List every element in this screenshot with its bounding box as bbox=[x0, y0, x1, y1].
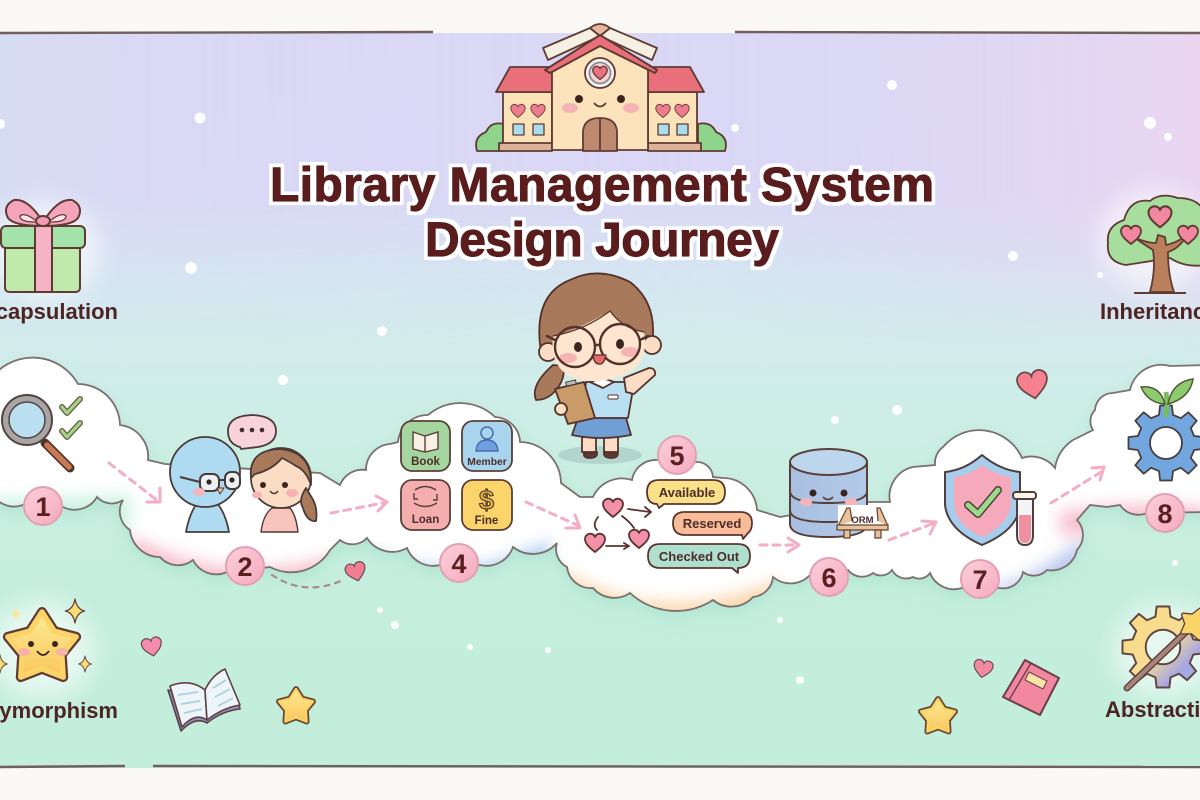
number badges: 8 bbox=[1157, 499, 1173, 529]
tile: fine: $ bbox=[479, 485, 494, 515]
corner icon glows bbox=[0, 190, 1200, 698]
dashed arrows between steps bbox=[109, 463, 1104, 552]
pill: available: Available bbox=[659, 485, 715, 500]
mouth bbox=[593, 355, 606, 364]
pill: reserved bbox=[673, 512, 752, 539]
step 1: magnifier and checks bbox=[2, 395, 80, 468]
pill: checked out bbox=[648, 544, 750, 573]
icon: small star left bbox=[279, 689, 313, 722]
icon: heart tree (inheritance) bbox=[1108, 196, 1200, 293]
sparkle dots bbox=[0, 80, 1178, 684]
librarian character bbox=[535, 273, 661, 464]
face bbox=[553, 311, 645, 381]
step 2: two people with speech bubble bbox=[170, 415, 316, 532]
step 8: gear with sprout bbox=[1128, 379, 1200, 480]
icon: gear and wand (abstraction) bbox=[1122, 605, 1200, 688]
title: Design Journey bbox=[425, 214, 779, 267]
title bbox=[270, 159, 934, 267]
hair back bbox=[539, 273, 653, 352]
ponytail bbox=[535, 365, 564, 400]
main block bbox=[552, 44, 648, 150]
pill: checked out: Checked Out bbox=[659, 549, 740, 564]
step 5: state machine bbox=[585, 480, 752, 573]
tile: loan: Loan bbox=[412, 514, 439, 526]
cloud path: journey trail bbox=[0, 358, 1200, 625]
pill: reserved: Reserved bbox=[683, 516, 741, 531]
open book roof bbox=[543, 28, 657, 60]
tile: fine bbox=[462, 480, 512, 530]
ears bbox=[539, 343, 557, 361]
icon: closed pink book bbox=[1003, 660, 1059, 715]
bushes bbox=[476, 123, 726, 151]
step 4: domain model tiles bbox=[401, 421, 512, 530]
number badges: 5 bbox=[669, 441, 685, 471]
school face bbox=[562, 95, 639, 113]
step 7: shield and test tube bbox=[945, 455, 1036, 545]
skirt bbox=[572, 418, 631, 438]
clipboard bbox=[555, 382, 595, 424]
icon: small star right bbox=[921, 699, 955, 732]
decorative hearts bbox=[141, 369, 1050, 679]
blouse and waving arm bbox=[580, 382, 632, 418]
tile: book: Book bbox=[411, 456, 440, 468]
icon: smiling star (polymorphism) bbox=[0, 599, 91, 677]
glasses bbox=[547, 324, 648, 367]
wing windows bbox=[511, 104, 689, 117]
number badges bbox=[24, 436, 1184, 598]
icon: gift box (encapsulation) bbox=[1, 200, 85, 292]
step 6: database with ORM bridge bbox=[790, 449, 888, 538]
icon: open book bbox=[168, 669, 240, 731]
dashed trail to heart bbox=[272, 575, 343, 587]
number badges: 4 bbox=[451, 549, 467, 579]
number badges: 7 bbox=[972, 565, 988, 595]
number badges: 2 bbox=[237, 552, 253, 582]
number badges: 1 bbox=[35, 492, 51, 522]
title: Library Management System bbox=[270, 159, 934, 212]
speech bubble bbox=[228, 415, 276, 449]
legs and shoes bbox=[582, 437, 618, 452]
tile: fine: Fine bbox=[475, 515, 498, 527]
number badges: 6 bbox=[821, 563, 837, 593]
pill: available bbox=[647, 480, 725, 508]
tile: member: Member bbox=[467, 457, 507, 468]
ORM bridge: ORM bbox=[851, 515, 874, 526]
wings bbox=[503, 92, 697, 144]
icon: library building bbox=[476, 24, 726, 151]
